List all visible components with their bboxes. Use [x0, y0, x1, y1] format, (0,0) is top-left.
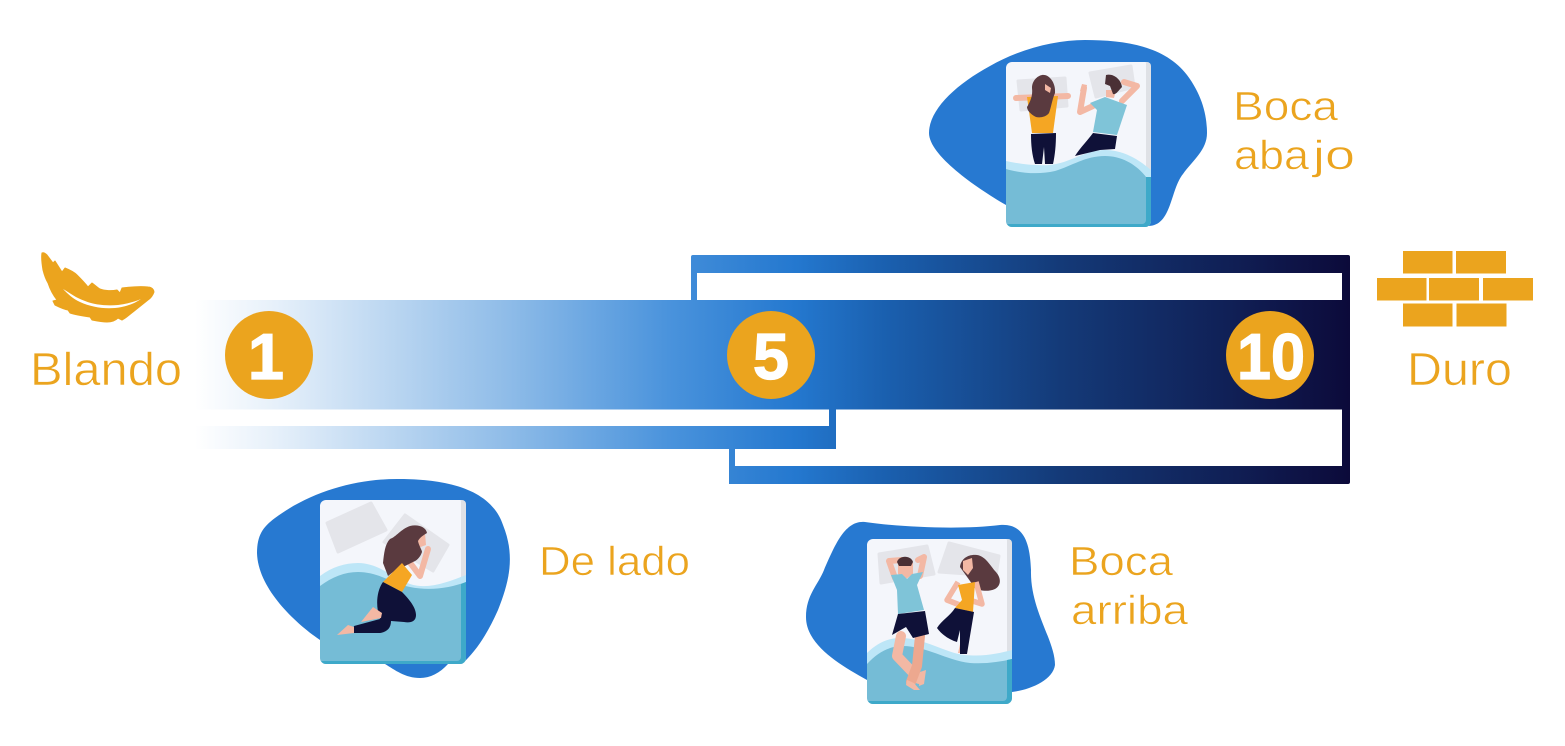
blue blob: [929, 40, 1207, 226]
label: Boca abajo: jo: [1312, 132, 1355, 178]
man face down: [1075, 75, 1137, 156]
label: Boca abajo: Boca: [1233, 83, 1338, 129]
mattress: [320, 500, 466, 664]
mattress: [867, 539, 1012, 704]
scale marker 10: [1226, 311, 1314, 399]
label: De lado: De lado: [539, 538, 690, 584]
label: Boca abajo: aba: [1234, 132, 1309, 178]
scale marker 10: 10: [1237, 320, 1305, 393]
illustration: de lado: [257, 479, 510, 678]
label: Duro: Duro: [1407, 343, 1512, 395]
scale marker 5: [727, 311, 815, 399]
lower left bracket: de lado range: [195, 409, 836, 449]
blue blob: [257, 479, 510, 678]
firmness scale bar: [195, 255, 1350, 484]
illustration: boca abajo: [929, 40, 1207, 227]
label: Blando: Blando: [30, 343, 182, 395]
scale marker 5: 5: [753, 320, 789, 393]
illustration: boca arriba: [806, 522, 1055, 704]
label: Boca arriba: arriba: [1071, 587, 1188, 633]
scale marker 1: [225, 311, 313, 399]
label: Boca arriba: [1069, 538, 1188, 633]
label: Boca abajo: [1233, 83, 1355, 178]
mattress: [1006, 62, 1151, 227]
blue blob: [806, 522, 1055, 692]
woman on side: [337, 525, 428, 635]
lower right bracket: boca arriba range: [729, 409, 1350, 484]
pillows: [879, 543, 999, 583]
icon: feather: [42, 253, 154, 322]
main gradient bar: [195, 300, 1350, 410]
pillows: [327, 503, 448, 571]
woman face down: [1016, 75, 1068, 164]
woman on back: [937, 555, 1000, 654]
man on back: [889, 557, 929, 690]
pillows: [1018, 66, 1134, 110]
label: Boca arriba: Boca: [1069, 538, 1173, 584]
scale marker 1: 1: [248, 320, 284, 393]
upper bracket: boca abajo range: [691, 255, 1350, 300]
icon: bricks: [1377, 251, 1533, 326]
